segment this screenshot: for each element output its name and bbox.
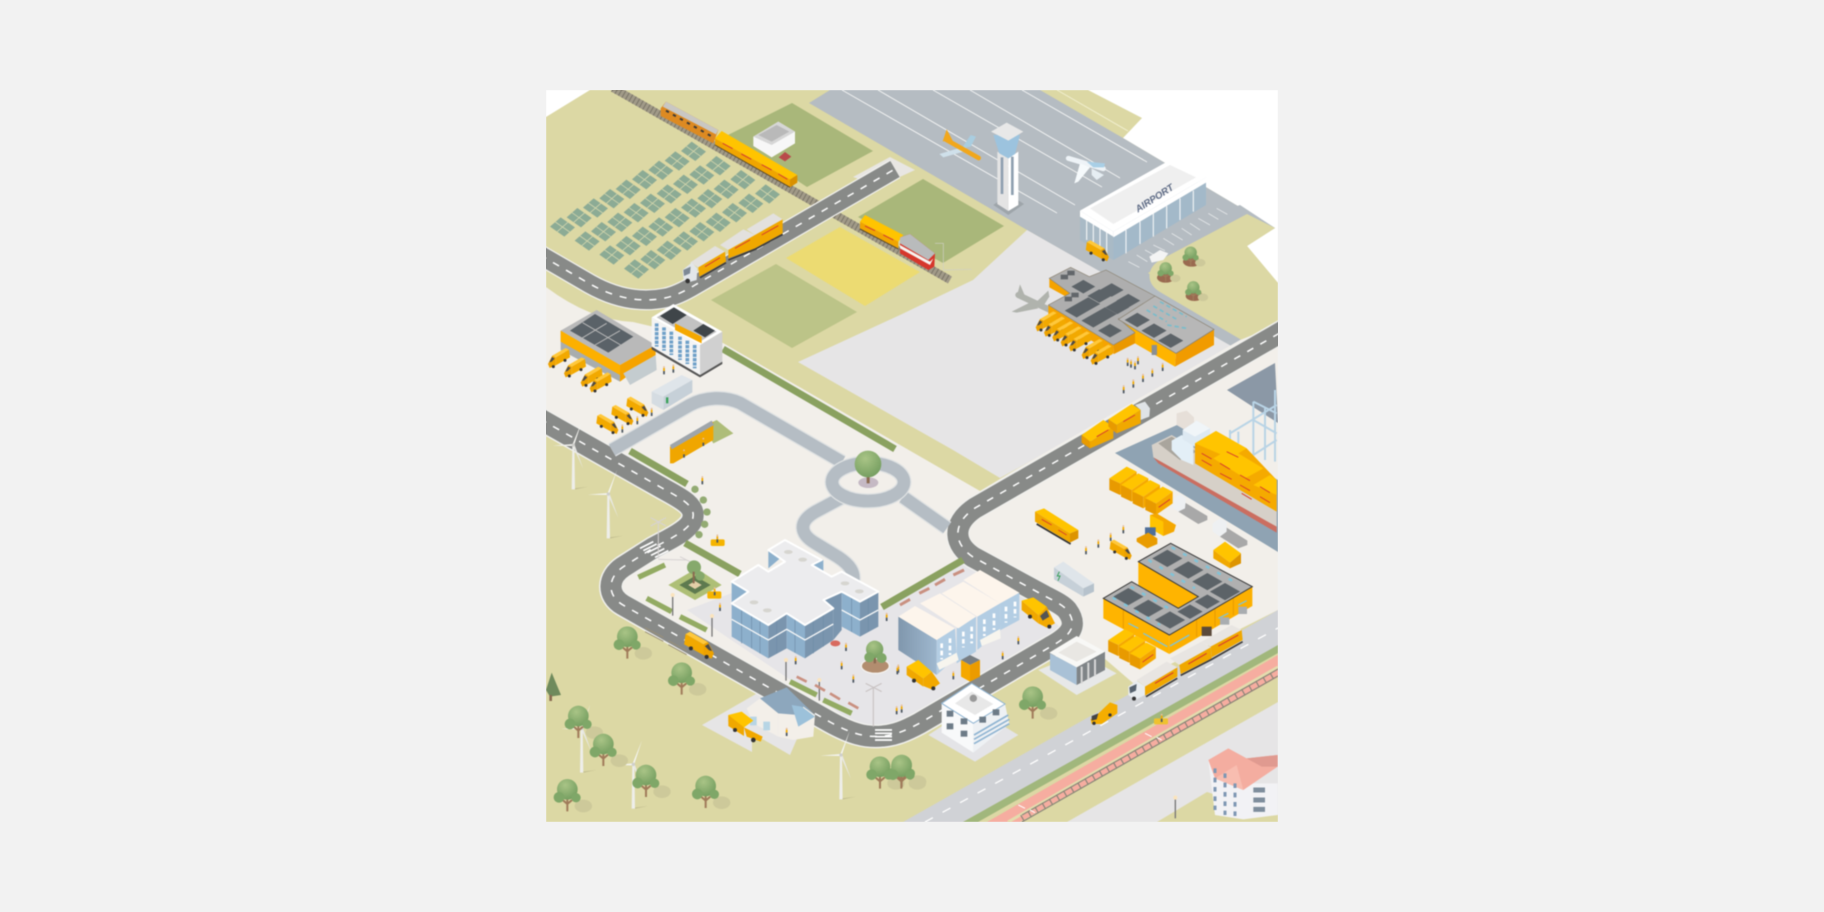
shop walls: [898, 593, 1019, 675]
locomotive: red: [900, 234, 972, 270]
airport trees: [1157, 246, 1208, 301]
shop roofs: [898, 570, 1019, 640]
street lamps: [671, 593, 821, 701]
land: khaki ground: [546, 90, 1278, 822]
hub rooftop units: [1061, 271, 1079, 301]
storage container: [652, 375, 692, 410]
plane shadow: [1012, 284, 1050, 313]
van on lower road: [1091, 702, 1117, 725]
pink-roof hotel: [1208, 748, 1278, 819]
quadrant: south east: [888, 467, 1278, 819]
warehouse walls: [1103, 562, 1252, 654]
energy container: [1054, 562, 1094, 597]
terrace benches: [900, 570, 964, 605]
field: dark green right: [858, 179, 1004, 263]
road: main loop: [540, 330, 1285, 736]
background: [546, 90, 1278, 282]
control tower: [991, 123, 1024, 215]
trees: [888, 686, 1057, 790]
barn: [753, 122, 795, 157]
road: top: [540, 169, 895, 300]
airport terminal: [1080, 160, 1206, 260]
runway area: [809, 90, 1275, 350]
port crane: [1230, 390, 1277, 462]
forklift and workers: [1085, 513, 1176, 554]
plaza people, stand and benches: [719, 603, 903, 714]
hospital walls: [732, 550, 878, 658]
port: [1152, 390, 1277, 548]
quadrant: north west: [548, 102, 903, 489]
scooter and person: [701, 476, 725, 546]
van on plaza: [907, 660, 940, 690]
container on chassis: [1035, 508, 1078, 544]
wind turbine: [554, 428, 582, 490]
hedges: [630, 349, 963, 607]
warehouse roof: [1103, 543, 1252, 635]
train: south containers: [860, 215, 903, 249]
cyclist: [1154, 714, 1168, 724]
ship hull: [1152, 435, 1277, 533]
parcel locker kiosk: [961, 655, 980, 682]
field: dark green top: [728, 103, 873, 187]
workers on apron: [1123, 356, 1164, 393]
plaza: [687, 562, 1060, 733]
hospital roof: [732, 540, 878, 625]
container on trailer: [1213, 542, 1241, 568]
ship funnel and bridge: [1172, 411, 1210, 465]
quadrant: north east: [900, 123, 1227, 313]
apron vehicles and people: [1036, 311, 1164, 448]
truck on apron road: [1082, 402, 1150, 448]
hospital building: [732, 540, 878, 658]
wind turbines: [561, 470, 856, 809]
row of shops: [896, 570, 1055, 690]
garden with tree: [668, 560, 722, 600]
plaza light pole: [866, 683, 882, 727]
train: north with containers: [661, 102, 797, 187]
house: [747, 687, 815, 740]
quadrant: south west: [546, 451, 926, 812]
warehouse: northwest depot: [561, 310, 657, 385]
paths and roundabout: [612, 398, 947, 582]
apron: [798, 230, 1245, 478]
roundabout tree: [855, 451, 881, 488]
parcel lockers: [670, 420, 733, 463]
people near shops: [896, 636, 1019, 679]
white apartment: [928, 683, 1018, 762]
port containers: [1109, 467, 1173, 515]
solar farm: [550, 142, 780, 279]
lamp by the hotel: [1173, 796, 1177, 818]
plane: white on runway: [1068, 158, 1105, 183]
van on loop road: [684, 632, 714, 659]
street cross light: [651, 518, 693, 563]
delivery van at house: [728, 712, 763, 742]
scooter courier: [707, 587, 721, 599]
main warehouse: [1103, 543, 1252, 701]
hub roof: [1048, 267, 1214, 353]
van at airport: [1086, 240, 1109, 261]
right lawn beside airport: [1150, 214, 1278, 342]
cream logistics ground: [546, 287, 1278, 736]
fences: [645, 628, 687, 655]
van near shops: [1022, 597, 1055, 629]
field: olive: [711, 264, 857, 348]
containers in front of warehouse: [1108, 629, 1156, 669]
hub rooftop solar: [1065, 280, 1187, 348]
railway: [613, 88, 950, 280]
ship containers: [1195, 431, 1277, 512]
lower road and cycle lane: [903, 610, 1278, 822]
big truck on lower road: [1128, 625, 1243, 701]
flower beds: [638, 565, 852, 713]
truck: top road: [683, 213, 783, 283]
vans at cargo hub: [1036, 311, 1113, 365]
trees: [554, 626, 926, 812]
lane bike marks: [1018, 733, 1162, 813]
parking bays and car: [1128, 208, 1227, 267]
hub walls: [1048, 278, 1214, 367]
vans: depot: [548, 348, 674, 434]
tractor: [779, 152, 791, 161]
infographic: isometric logistics map: [546, 90, 1278, 822]
plaza tree: [861, 641, 889, 673]
field: yellow: [786, 227, 920, 306]
flatbed trucks: [1172, 494, 1247, 548]
plane: orange on runway: [939, 129, 979, 158]
conifer: [546, 673, 561, 701]
crossing: [640, 542, 892, 740]
van in yard: [1110, 540, 1132, 560]
harbour water: [1115, 363, 1278, 552]
cargo hub warehouse: [1048, 267, 1214, 367]
airport terminal: AIRPORT: [1133, 182, 1177, 216]
tunnel entrance: [853, 156, 915, 179]
shrubs along path: [691, 486, 711, 538]
office tower: [652, 304, 722, 377]
white bank building: [1038, 636, 1117, 695]
house plot: [702, 694, 797, 756]
